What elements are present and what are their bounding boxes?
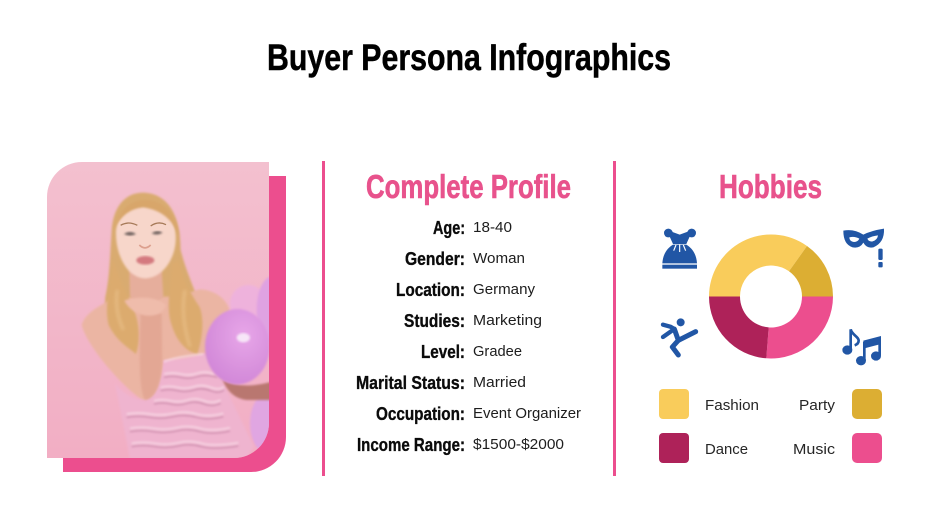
row: location — [396, 280, 536, 300]
front balloon — [205, 309, 270, 384]
legend: fashion: Fashion — [705, 397, 759, 414]
row: occupation: Occupation: — [376, 404, 465, 424]
divider left — [322, 161, 325, 476]
row: location: Location: — [396, 280, 465, 300]
hair front locks — [106, 292, 204, 354]
legend: music — [793, 433, 882, 463]
title: Buyer Persona Infographics — [267, 37, 671, 78]
legend: party — [799, 389, 882, 419]
row: gender — [405, 249, 525, 269]
row: location: Germany — [473, 282, 536, 298]
panel: hobbies — [659, 168, 884, 463]
row: studies — [404, 311, 542, 331]
icon: kicking dancer — [663, 318, 696, 355]
right forearm — [223, 380, 272, 400]
hair behind — [104, 191, 196, 304]
legend — [659, 389, 882, 463]
dress ruffles — [127, 354, 238, 448]
segment: party — [789, 246, 833, 296]
photo of woman with balloons — [47, 162, 287, 458]
row: level: Level: — [421, 342, 465, 362]
segment: music — [766, 296, 833, 358]
heading: hobbies: Hobbies — [719, 168, 822, 205]
pink offset backing shape — [63, 176, 286, 472]
row: age — [433, 218, 512, 238]
row: occupation: Event Organizer — [473, 406, 581, 422]
arms, chest and shoulders — [82, 289, 229, 400]
row: marital status: Marital Status: — [356, 373, 465, 393]
eyes and brows — [124, 231, 163, 236]
row: income range: Income Range: — [357, 435, 465, 455]
divider right — [613, 161, 616, 476]
row: income range: $1500-$2000 — [473, 437, 564, 453]
row: level — [421, 342, 522, 362]
legend: party: Party — [799, 397, 836, 414]
lips and nose — [136, 256, 154, 265]
legend: dance: Dance — [705, 441, 748, 458]
panel: portrait photo — [47, 162, 287, 472]
donut chart — [709, 234, 833, 358]
row: gender: Woman — [473, 251, 525, 267]
icon: dress — [662, 229, 697, 269]
row: level: Gradee — [473, 344, 522, 360]
heading: complete profile: Complete Profile — [366, 168, 571, 205]
row: income range — [357, 435, 564, 455]
dress — [115, 353, 254, 458]
icon: mask — [843, 229, 884, 267]
segment: fashion — [709, 234, 807, 296]
legend: music: Music — [793, 441, 836, 458]
row: studies: Marketing — [473, 313, 542, 329]
back balloons — [230, 285, 260, 316]
segment: dance — [709, 296, 769, 358]
balloon highlight — [237, 333, 250, 342]
face — [116, 205, 176, 278]
row: age: 18-40 — [473, 220, 512, 236]
icon: music notes — [842, 329, 881, 365]
row: age: Age: — [433, 218, 465, 238]
row: marital status: Married — [473, 375, 526, 391]
forearm and hand — [140, 313, 162, 400]
legend: fashion — [659, 389, 759, 419]
hairline — [116, 203, 180, 234]
row: studies: Studies: — [404, 311, 465, 331]
neck — [128, 271, 164, 298]
row: gender: Gender: — [405, 249, 465, 269]
legend: dance — [659, 433, 748, 463]
row: occupation — [376, 404, 581, 424]
panel: complete profile — [356, 168, 581, 455]
